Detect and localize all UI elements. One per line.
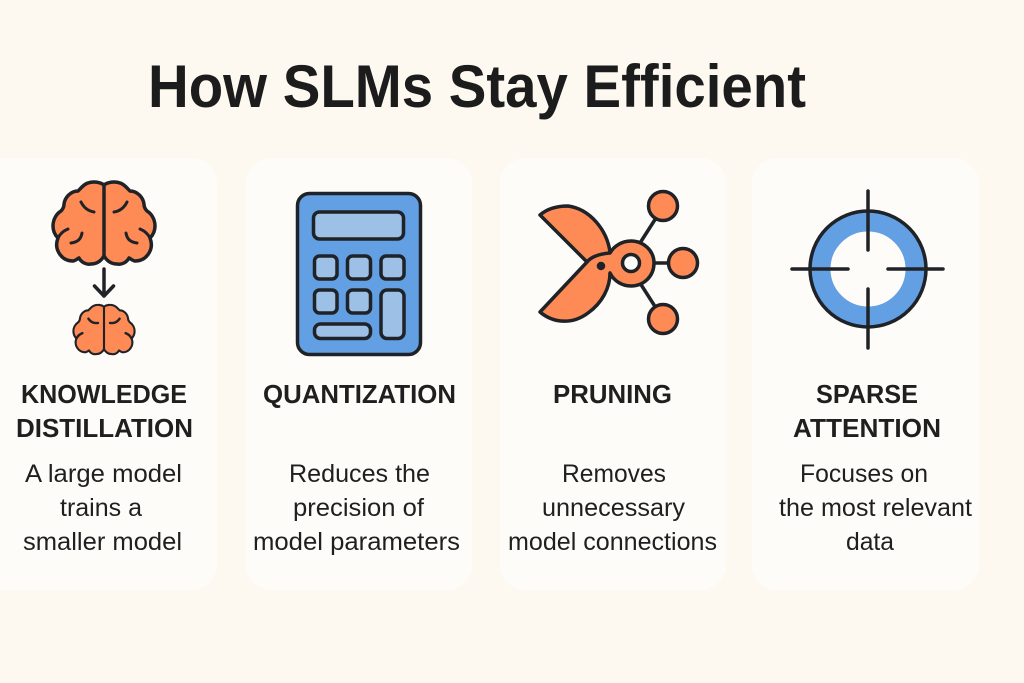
text: sparse attention description: data	[846, 528, 894, 556]
panel: knowledge distillation	[0, 158, 217, 590]
title: How SLMs Stay Efficient	[148, 53, 806, 120]
heading: sparse attention: ATTENTION	[793, 413, 941, 443]
text: quantization description: precision of	[293, 494, 424, 522]
text: sparse attention description	[779, 460, 972, 556]
text: knowledge distillation description	[23, 460, 182, 556]
heading: quantization: QUANTIZATION	[263, 379, 456, 409]
icon: large brain to small brain	[53, 182, 155, 354]
text: pruning description	[508, 460, 717, 556]
icon: calculator	[298, 194, 420, 354]
heading: sparse attention	[793, 379, 941, 443]
text: quantization description: model parameters	[253, 528, 460, 556]
text: pruning description: model connections	[508, 528, 717, 556]
text: sparse attention description: the most relevant	[779, 494, 972, 522]
panel: sparse attention	[752, 158, 979, 590]
icon: large brain	[53, 182, 155, 264]
text: pruning description: unnecessary	[542, 494, 686, 522]
heading: sparse attention: SPARSE	[816, 379, 918, 409]
text: quantization description: Reduces the	[289, 460, 430, 488]
panel: pruning	[500, 158, 726, 590]
heading: knowledge distillation: DISTILLATION	[16, 413, 193, 443]
icon: small brain	[73, 305, 135, 354]
text: quantization description	[253, 460, 460, 556]
text: knowledge distillation description: A large model	[25, 460, 182, 488]
heading: pruning: PRUNING	[553, 379, 672, 409]
text: pruning description: Removes	[562, 460, 666, 488]
text: knowledge distillation description: trains a	[60, 494, 142, 522]
heading: knowledge distillation: KNOWLEDGE	[21, 379, 187, 409]
heading: knowledge distillation	[16, 379, 193, 443]
text: knowledge distillation description: smaller model	[23, 528, 182, 556]
icon: scissors cutting network	[540, 192, 698, 334]
icon: arrow down	[94, 269, 114, 296]
icon: target crosshair	[792, 191, 943, 348]
text: sparse attention description: Focuses on	[800, 460, 928, 488]
panel: quantization	[246, 158, 472, 590]
